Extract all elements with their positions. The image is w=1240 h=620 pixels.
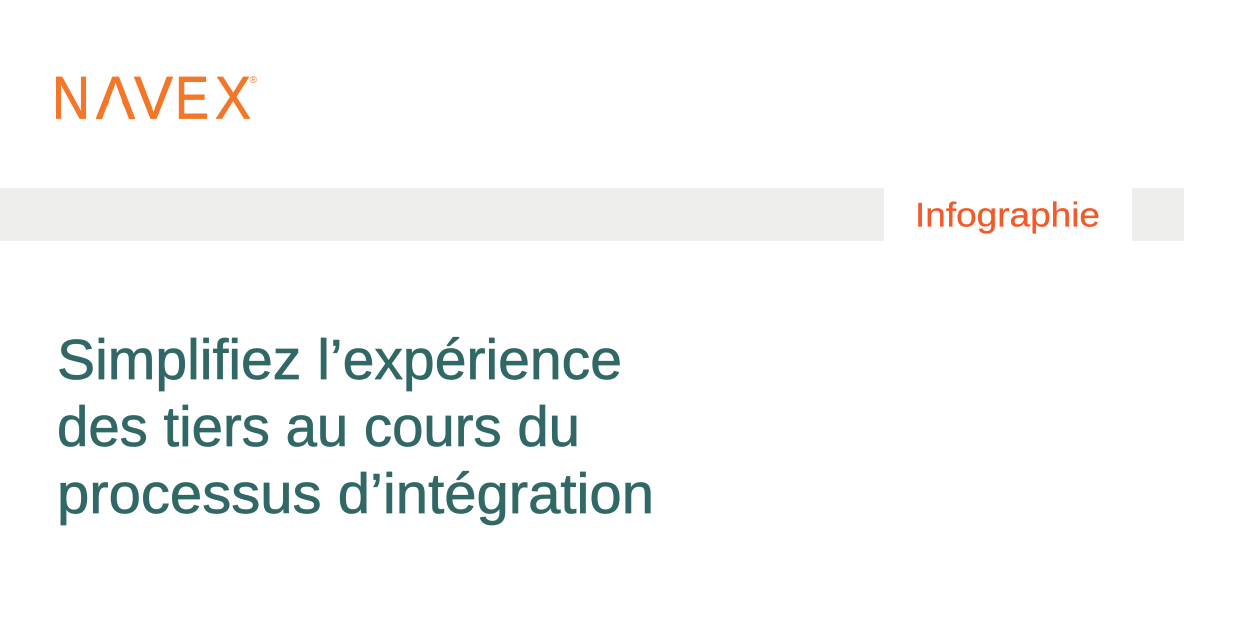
logo: NAVEX: V [134, 64, 173, 132]
banner: right grey block [1132, 188, 1184, 241]
logo: NAVEX: N [52, 64, 90, 132]
banner: left grey bar [0, 188, 884, 241]
logo: NAVEX: E [175, 64, 209, 132]
logo: NAVEX: X [215, 64, 251, 132]
title: Simplifiez l’expérience [57, 328, 622, 392]
title: des tiers au cours du [57, 395, 580, 459]
logo: NAVEX: A [96, 64, 135, 132]
logo: NAVEX [52, 64, 258, 132]
title: processus d’intégration [57, 462, 654, 526]
label: Infographie: Infographie [915, 196, 1100, 234]
logo: NAVEX: ® [250, 75, 258, 86]
title [57, 328, 654, 526]
